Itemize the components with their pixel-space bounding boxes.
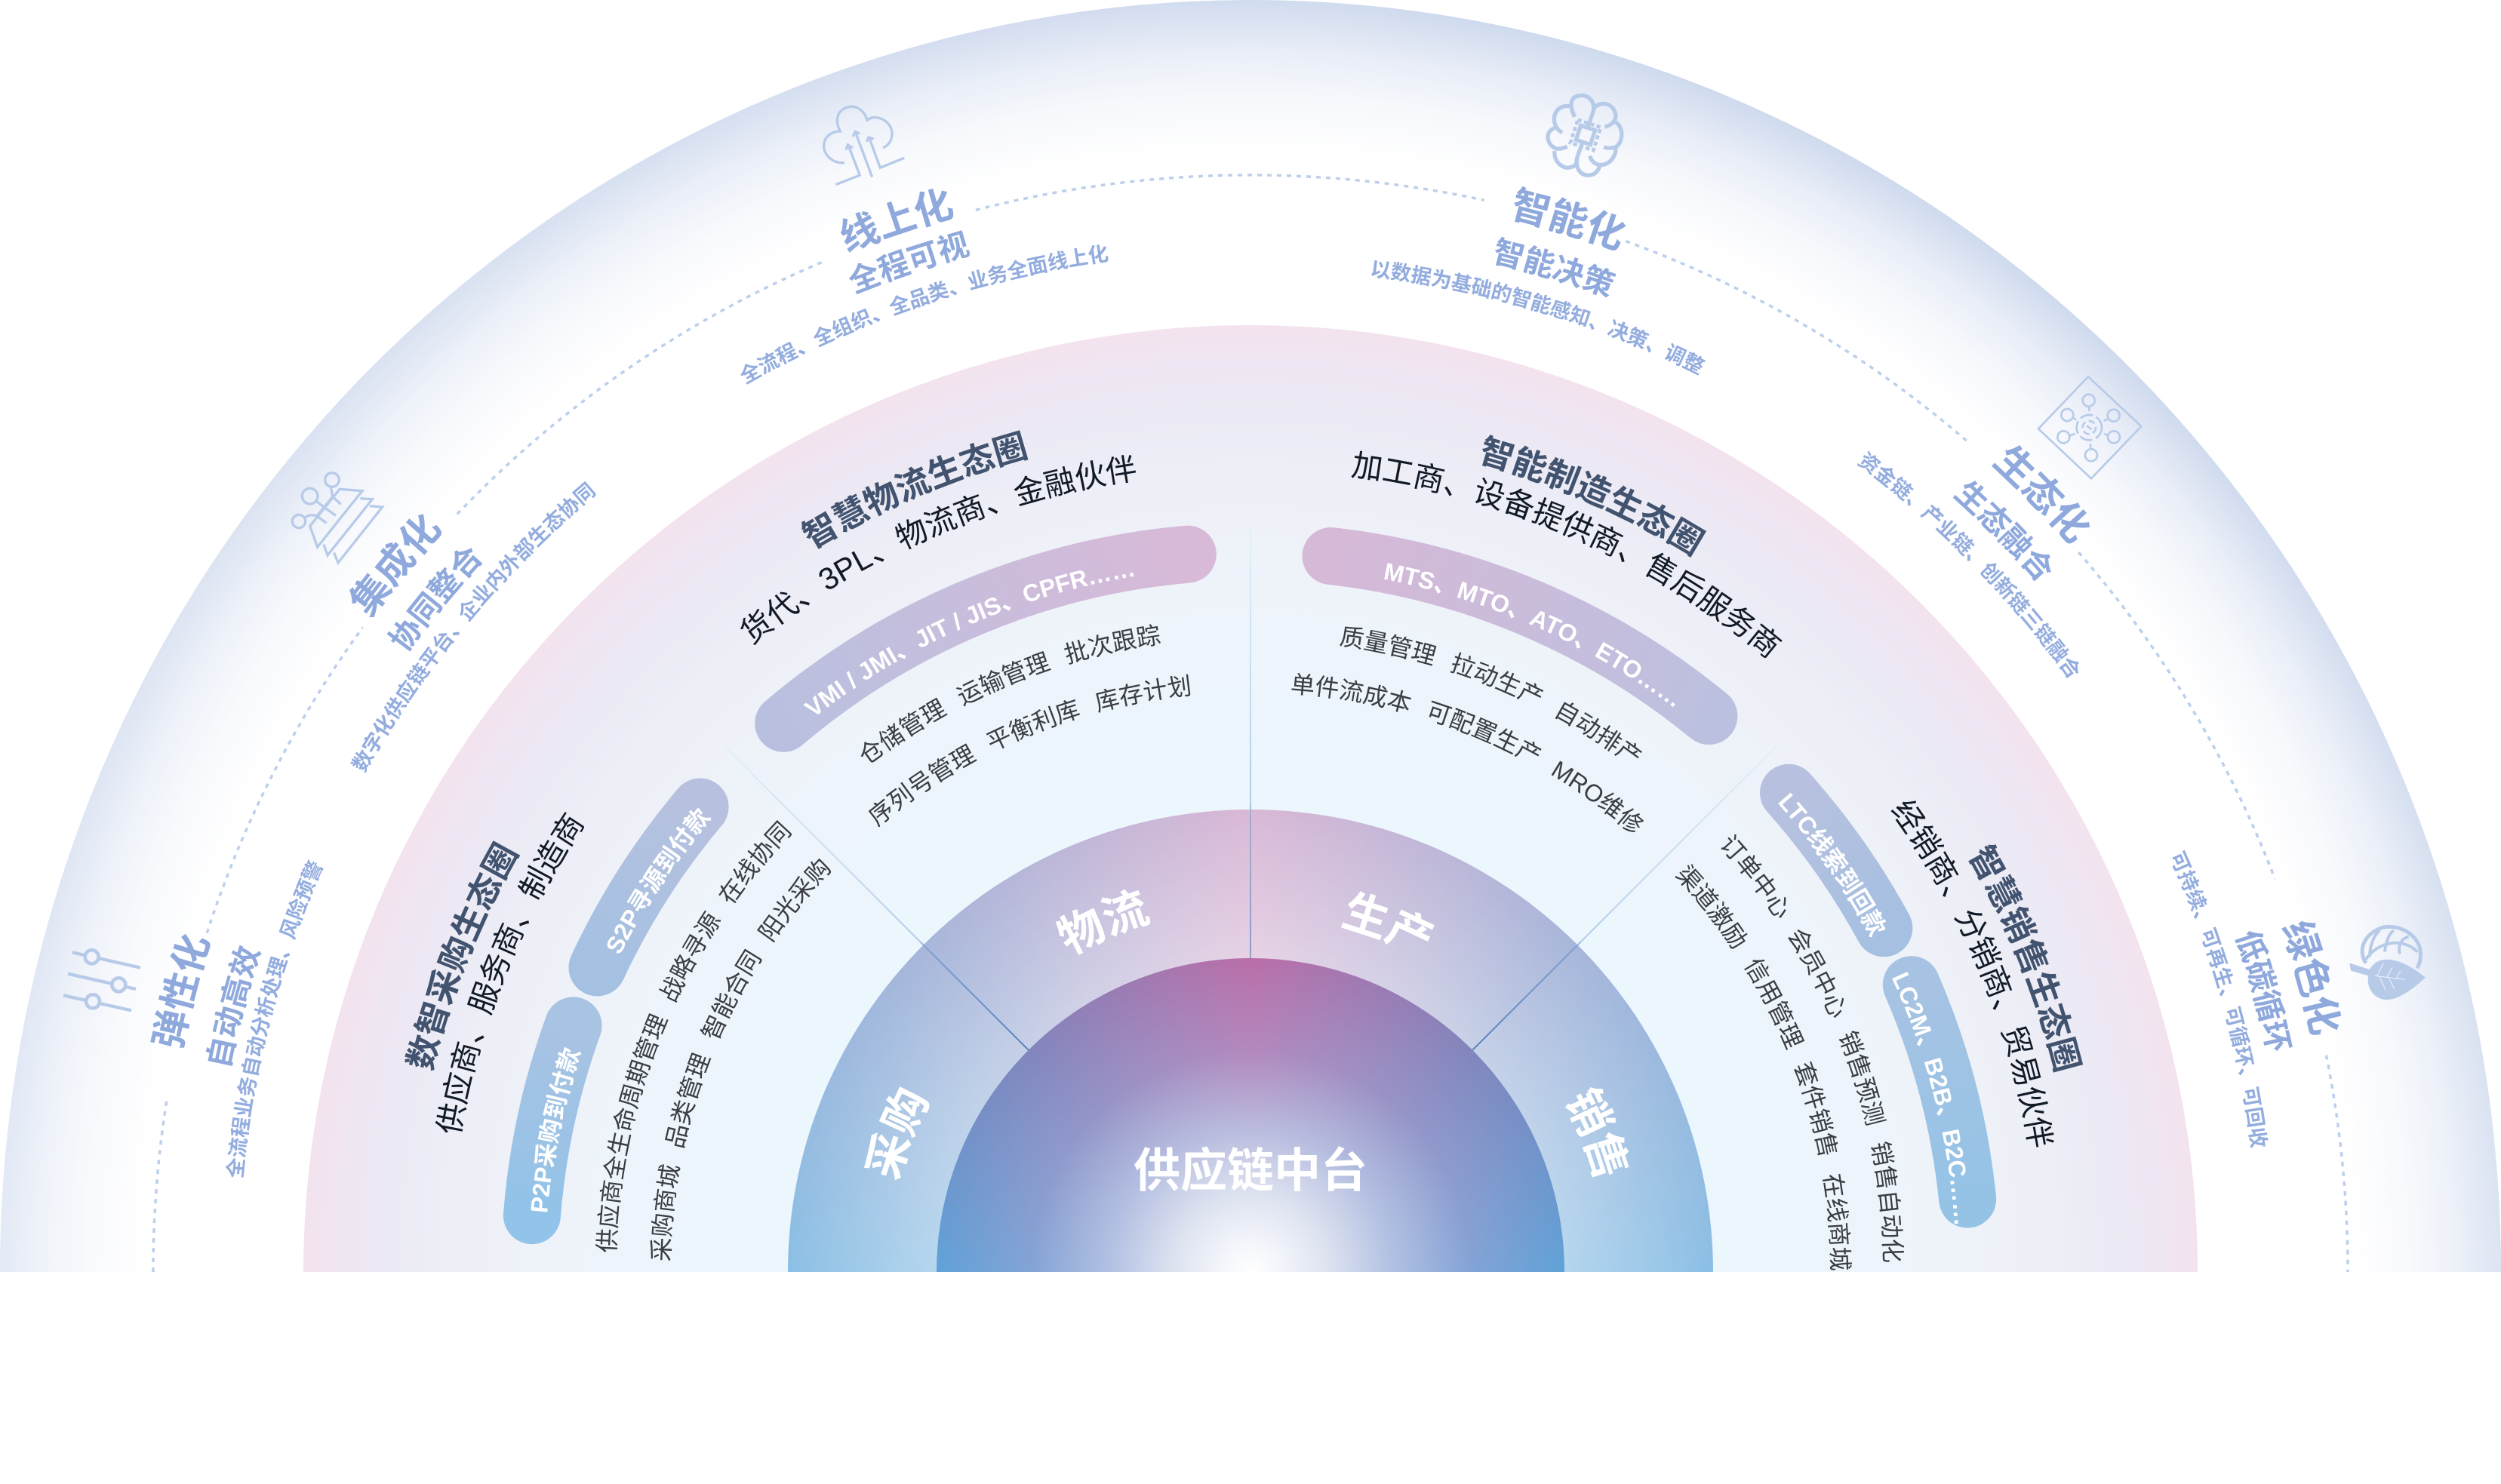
capabilities row 1: 采购: 供应商全生命周期管理 战略寻源 在线协同: [553, 800, 800, 1262]
segment: 生态化: [1852, 376, 2141, 685]
segment: 绿色化: [2164, 845, 2426, 1152]
capabilities row 2: 生产: 单件流成本 可配置生产 MRO维修: [1282, 641, 1660, 843]
subheading: 自动高效: 自动高效: [205, 945, 262, 1066]
heading: 智能制造生态圈: 智能制造生态圈: [1471, 423, 1713, 564]
subheading: 全程可视: 全程可视: [848, 230, 970, 294]
description: 集成化: 数字化供应链平台、企业内外部生态协同: [350, 481, 596, 773]
panel: central core disc: [937, 958, 1564, 1272]
center title: 供应链中台: 供应链中台: [1134, 1145, 1367, 1197]
subheading: 协同整合: 协同整合: [386, 548, 483, 652]
description: 智能化: 以数据为基础的智能感知、决策、调整: [1371, 260, 1706, 376]
icon: cloud upload: [824, 106, 904, 185]
panel: ecosystem ring background: [303, 325, 2198, 1272]
partners: 采购: 供应商、服务商、制造商: [435, 812, 584, 1133]
pill: MTS: MTS、MTO、ATO、ETO……: [1377, 540, 1696, 715]
segment: 智能化: [1365, 95, 1712, 379]
description: 弹性化: 全流程业务自动分析处理、风险预警: [226, 859, 324, 1178]
segment: 线上化: [730, 106, 1114, 389]
sector label: 采购: 采购: [855, 1080, 940, 1188]
heading: 集成化: 集成化: [349, 514, 442, 617]
capabilities row 2: 采购: 采购商城 品类管理 智能合同 阳光采购: [609, 837, 840, 1270]
heading: 智慧销售生态圈: 智慧销售生态圈: [1960, 836, 2095, 1080]
description: 生态化: 资金链、产业链、创新链三链融合: [1857, 451, 2078, 678]
heading: 数智采购生态圈: 数智采购生态圈: [405, 840, 521, 1071]
sector label: 生产: 生产: [1334, 883, 1442, 967]
capabilities row 2: 物流: 序列号管理 平衡利库 库存计划: [854, 648, 1200, 834]
heading: 智能化: 智能化: [1514, 186, 1626, 250]
partners: 物流: 货代、3PL、物流商、金融伙伴: [723, 424, 1147, 654]
dashed orbit ring: [153, 175, 2348, 1272]
panel: 数智采购生态圈: [393, 800, 840, 1270]
heading: 线上化: 线上化: [841, 189, 954, 253]
panel: 智能制造生态圈: [1282, 416, 1801, 843]
description: 绿色化: 可持续、可再生、可循环、可回收: [2172, 850, 2269, 1148]
description: 线上化: 全流程、全组织、全品类、业务全面线上化: [740, 244, 1108, 385]
capabilities row 1: 物流: 仓储管理 运输管理 批次跟踪: [846, 602, 1168, 773]
pill: LTC: LTC线索到回款: [1771, 785, 1895, 943]
pill: LC2M: LC2M、B2B、B2C……: [1886, 965, 1989, 1231]
segment: 弹性化: [63, 854, 328, 1182]
pill: P2P: P2P采购到付款: [521, 1043, 586, 1217]
sector label: 物流: 物流: [1049, 880, 1158, 966]
segment: 集成化: [292, 468, 602, 779]
subheading: 智能决策: 智能决策: [1495, 237, 1617, 297]
capabilities row 1: 销售: 订单中心 会员中心 销售预测 销售自动化: [1712, 815, 1946, 1272]
icon: sliders: [63, 950, 140, 1010]
sector label: 销售: 销售: [1555, 1080, 1640, 1188]
subheading: 低碳循环: 低碳循环: [2235, 931, 2293, 1051]
heading: 智慧物流生态圈: 智慧物流生态圈: [793, 419, 1036, 558]
capabilities row 1: 生产: 质量管理 拉动生产 自动排产: [1332, 604, 1655, 774]
partners: 销售: 经销商、分销商、贸易伙伴: [1882, 785, 2078, 1157]
capabilities row 2: 销售: 渠道激励 信用管理 套件销售 在线商城: [1668, 845, 1893, 1272]
pill: VMI: VMI / JMI、JIT / JIS、CPFR……: [791, 533, 1143, 725]
icon: brain chip: [1548, 95, 1622, 175]
icon: layers with nodes: [292, 473, 383, 563]
sector divider lines: [724, 528, 1777, 1050]
panel: 智慧物流生态圈: [723, 419, 1200, 834]
icon: leaf globe: [2349, 926, 2426, 1000]
partners: 生产: 加工商、设备提供商、售后服务商: [1341, 416, 1801, 668]
subheading: 生态融合: 生态融合: [1953, 481, 2051, 581]
heading: 弹性化: 弹性化: [150, 934, 211, 1049]
pill: S2P: S2P寻源到付款: [607, 807, 711, 954]
heading: 绿色化: 绿色化: [2281, 920, 2341, 1035]
heading: 生态化: 生态化: [1992, 445, 2090, 543]
panel: business domain ring: [788, 810, 1713, 1272]
icon: network diamond: [2038, 376, 2141, 478]
panel: 智慧销售生态圈: [1668, 785, 2095, 1280]
